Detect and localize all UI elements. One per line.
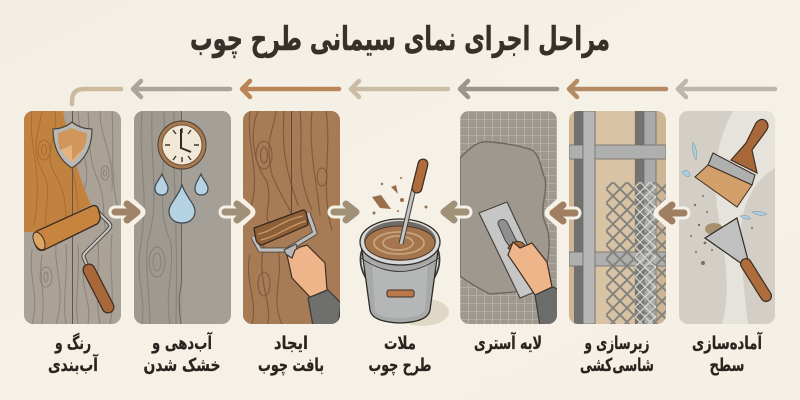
panel: primer layer	[460, 111, 560, 326]
icon: paint roller	[30, 206, 110, 307]
plank seam	[72, 111, 73, 324]
icon: water splashes	[682, 142, 767, 219]
connector: down to last card	[72, 89, 121, 104]
panel: wood-pattern mortar	[360, 164, 449, 326]
panel: paint and waterproofing	[24, 111, 121, 324]
icon: clock	[158, 121, 206, 169]
top flow arrows	[72, 81, 775, 104]
label: mortar: طرح چوب	[368, 355, 432, 376]
icon: putty knife	[705, 218, 766, 296]
icon: water drops	[155, 174, 208, 223]
painted wood area	[24, 111, 91, 232]
label: primer layer: لایه آستری	[474, 331, 542, 354]
arrow: step 3	[460, 81, 557, 97]
arrow: mortar to panel 3	[334, 202, 358, 222]
label: wood texture	[258, 333, 324, 376]
label: watering and drying: خشک شدن	[144, 355, 220, 376]
plank seam	[179, 111, 182, 324]
panel: substructure and lath	[569, 111, 666, 324]
arrow: step 5	[242, 81, 339, 97]
label: surface preparation: آماده‌سازی	[692, 331, 763, 354]
arrow: step 1	[678, 81, 775, 97]
arrow: step 6	[133, 81, 230, 97]
icon: mixing stick	[401, 164, 423, 244]
label: surface preparation	[692, 331, 763, 376]
plank seam	[291, 111, 292, 214]
label: paint and waterproofing: آب‌بندی	[48, 353, 99, 376]
arrow: panel 6 to 5	[551, 203, 575, 223]
icon: paint brush	[695, 119, 768, 207]
icon: mortar splashes	[372, 177, 428, 214]
bucket shadow	[395, 298, 449, 326]
label: watering and drying: آب‌دهی و	[151, 331, 213, 354]
arrow: step 2	[569, 81, 666, 97]
label: substructure	[580, 333, 654, 376]
arrow: step 4	[351, 81, 448, 97]
arrow: panel 7 to 6	[660, 203, 684, 223]
steel studs	[569, 111, 666, 324]
icon: hand	[287, 245, 341, 326]
label: mortar: ملات	[384, 333, 416, 354]
panel: watering and drying	[134, 111, 231, 324]
label: wood texture: بافت چوب	[258, 355, 324, 376]
arrow: panel 5 to mortar	[442, 202, 466, 222]
icon: trowel	[478, 201, 534, 299]
label: mortar	[368, 333, 432, 376]
panel: wood texture	[243, 111, 341, 326]
label: substructure: زیرسازی و	[584, 333, 650, 354]
step arrows between panels	[115, 202, 684, 223]
arrow: panel 2 to 1	[115, 202, 139, 222]
icon: hand	[508, 242, 560, 326]
label: substructure: شاسی‌کشی	[580, 355, 654, 376]
debris specks	[690, 195, 753, 265]
label: surface preparation: سطح	[710, 355, 744, 376]
icon: texture roller	[253, 210, 315, 262]
label: watering and drying	[144, 331, 220, 376]
label: paint and waterproofing: رنگ و	[54, 332, 91, 354]
icon: bucket	[360, 219, 440, 323]
cement patch	[460, 142, 549, 294]
label: wood texture: ایجاد	[274, 333, 308, 354]
icon: shield	[53, 122, 92, 168]
metal mesh	[606, 182, 666, 324]
arrow: panel 3 to 2	[225, 202, 249, 222]
title: مراحل اجرای نمای سیمانی طرح چوب	[190, 19, 610, 59]
label: paint and waterproofing	[48, 332, 99, 376]
panel: surface preparation	[679, 111, 775, 324]
